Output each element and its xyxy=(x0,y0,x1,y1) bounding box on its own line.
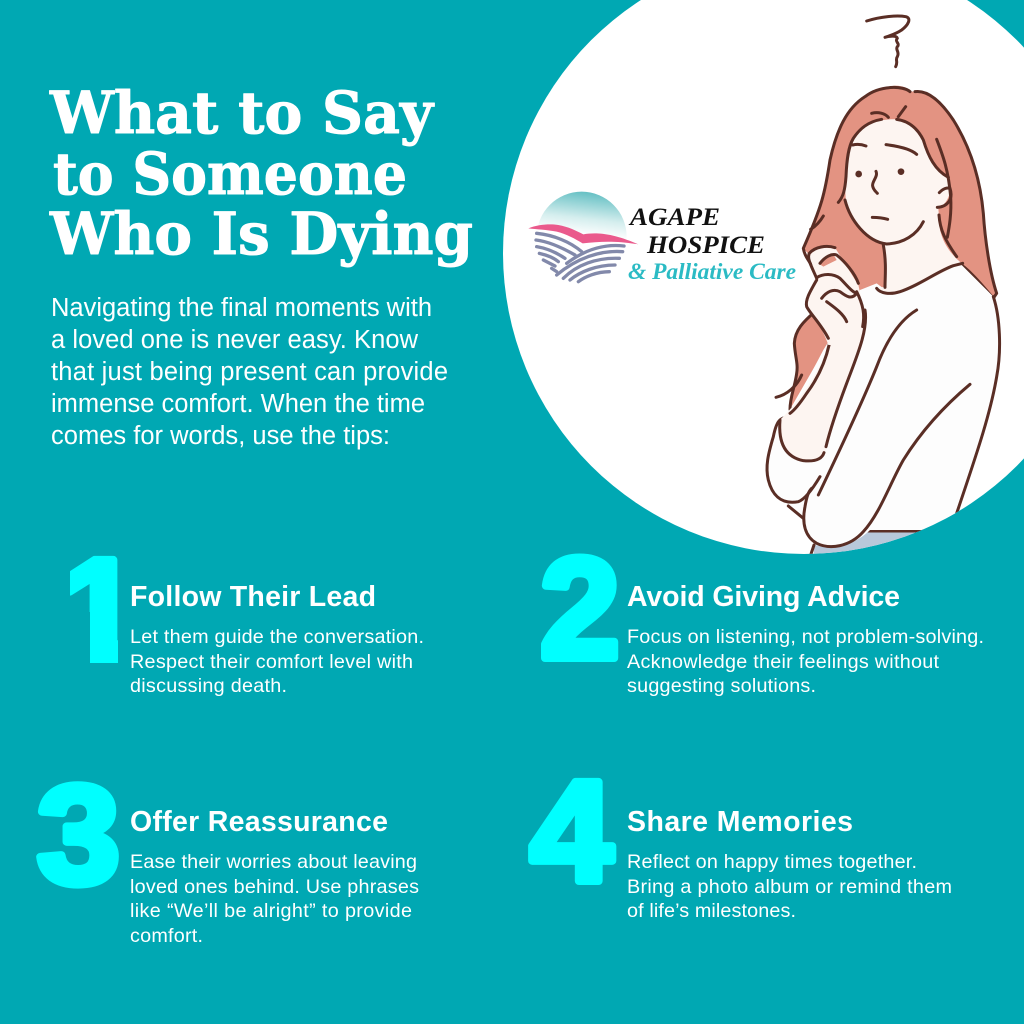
hair xyxy=(803,86,997,298)
sweater xyxy=(767,263,1000,547)
body 1: Let them guide the conversation. xyxy=(130,626,424,648)
logo: Agape Hospice and Palliative Care xyxy=(528,192,796,284)
body 2: Focus on listening, not problem-solving. xyxy=(627,626,984,648)
body 1: Respect their comfort level with xyxy=(130,651,413,673)
title: Who Is Dying xyxy=(49,200,473,268)
logo wordmark: AGAPE xyxy=(628,204,720,231)
number 4: 4 xyxy=(530,751,613,912)
body 4: Reflect on happy times together. xyxy=(627,851,917,873)
intro text: that just being present can provide xyxy=(51,358,448,386)
intro text: a loved one is never easy. Know xyxy=(51,326,419,354)
heading 2: Avoid Giving Advice xyxy=(627,581,900,613)
body 1 xyxy=(130,626,424,697)
tip 4: Share Memories xyxy=(530,751,952,922)
intro text: Navigating the final moments with xyxy=(51,294,432,322)
forearm and hand xyxy=(780,310,866,461)
body 2: Acknowledge their feelings without xyxy=(627,651,940,673)
heading 3: Offer Reassurance xyxy=(130,806,388,838)
face and neck xyxy=(838,119,963,293)
body 3 xyxy=(130,851,419,947)
question mark scribble xyxy=(867,16,909,67)
body 3: comfort. xyxy=(130,925,203,947)
intro text xyxy=(51,294,448,450)
intro text: comes for words, use the tips: xyxy=(51,422,390,450)
title xyxy=(49,79,473,268)
logo mark xyxy=(528,192,638,282)
facial features xyxy=(853,144,917,219)
fingers xyxy=(806,246,865,345)
body 3: Ease their worries about leaving xyxy=(130,851,417,873)
body 3: loved ones behind. Use phrases xyxy=(130,876,419,898)
body 4 xyxy=(627,851,952,922)
title: to Someone xyxy=(53,140,407,208)
body 2 xyxy=(627,626,984,697)
illustration: thinking woman xyxy=(767,86,1000,560)
title: What to Say xyxy=(49,79,435,147)
body 4: Bring a photo album or remind them xyxy=(627,876,952,898)
white circle backdrop xyxy=(503,0,1024,554)
body 1: discussing death. xyxy=(130,675,287,697)
lower hair strand xyxy=(776,312,830,409)
logo wordmark xyxy=(628,204,796,284)
tip 2: Avoid Giving Advice xyxy=(540,528,984,697)
logo wordmark: & Palliative Care xyxy=(628,259,796,284)
tip 3: Offer Reassurance xyxy=(37,756,419,947)
logo wordmark: HOSPICE xyxy=(646,232,765,259)
body 3: like “We’ll be alright” to provide xyxy=(130,900,412,922)
number 2: 2 xyxy=(540,528,620,689)
body 4: of life’s milestones. xyxy=(627,900,796,922)
pants xyxy=(810,530,922,554)
number 1: 1 xyxy=(60,529,140,690)
tip 1: Follow Their Lead xyxy=(70,556,422,696)
body 2: suggesting solutions. xyxy=(627,675,816,697)
intro text: immense comfort. When the time xyxy=(51,390,425,418)
heading 4: Share Memories xyxy=(627,806,853,838)
number 3: 3 xyxy=(37,756,120,913)
heading 1: Follow Their Lead xyxy=(130,581,376,613)
